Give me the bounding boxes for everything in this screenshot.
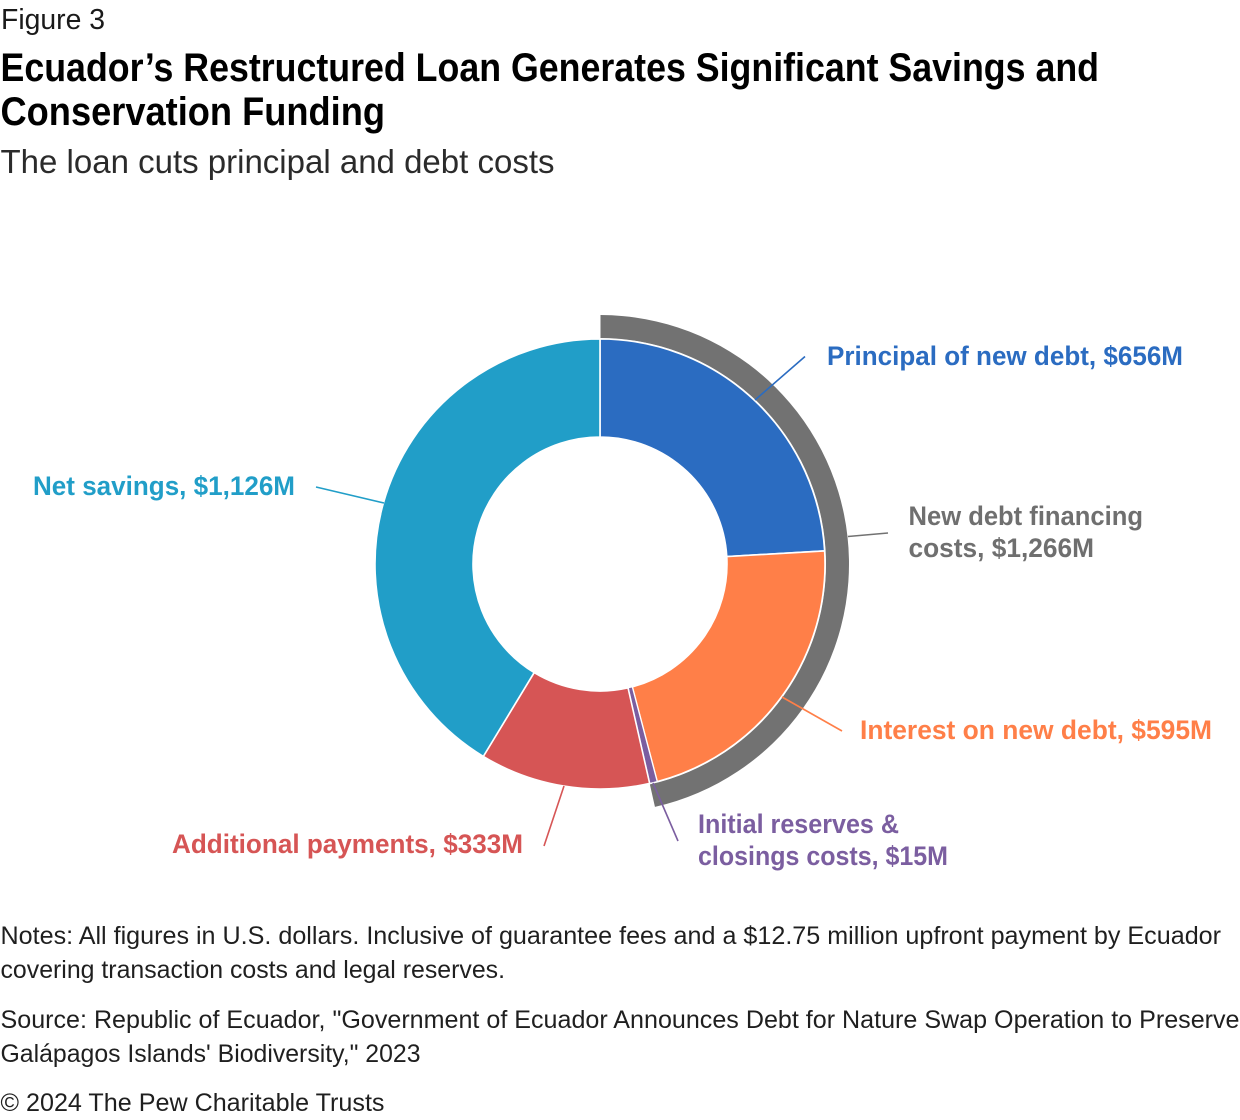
segment: net savings (375, 339, 600, 756)
source: Galápagos Islands' Biodiversity," 2023 (0, 1040, 420, 1068)
label: additional payments: Additional payments, $333M (172, 829, 523, 859)
leader line: interest (782, 697, 842, 731)
leader line: additional payments (544, 786, 564, 846)
title: Conservation Funding (0, 90, 385, 134)
label: principal: Principal of new debt, $656M (827, 341, 1183, 371)
segment: interest on new debt (632, 551, 825, 782)
leader line: reserves (653, 783, 678, 841)
source: Source: Republic of Ecuador, "Government of Ecuador Announces Debt for Nature Swap Operation to Preserve (0, 1006, 1240, 1034)
title: Ecuador’s Restructured Loan Generates Significant Savings and (0, 46, 1099, 90)
notes (0, 922, 1221, 984)
leader line: principal (755, 356, 805, 400)
segment: initial reserves and closing costs (628, 687, 657, 783)
copyright: © 2024 The Pew Charitable Trusts (0, 1089, 384, 1117)
donut chart (375, 315, 849, 807)
label: interest: Interest on new debt, $595M (860, 715, 1212, 745)
subtitle: The loan cuts principal and debt costs (0, 143, 554, 180)
label: reserves (698, 809, 948, 871)
label: reserves: Initial reserves & (698, 809, 899, 839)
leader line: financing costs (848, 533, 888, 536)
source (0, 1006, 1240, 1068)
figure number: Figure 3 (1, 4, 105, 36)
title (0, 46, 1099, 134)
segment: principal of new debt (600, 339, 825, 557)
outer ring: new debt financing costs (600, 315, 849, 807)
label: financing costs: New debt financing (908, 501, 1143, 531)
leader line: net savings (316, 487, 384, 503)
label: reserves: closings costs, $15M (698, 841, 948, 871)
label: net savings: Net savings, $1,126M (33, 471, 295, 501)
label: financing costs (908, 501, 1143, 563)
notes: covering transaction costs and legal reserves. (0, 956, 505, 984)
notes: Notes: All figures in U.S. dollars. Inclusive of guarantee fees and a $12.75 million upfront payment by Ecuador (0, 922, 1221, 950)
label: financing costs: costs, $1,266M (908, 533, 1094, 563)
segment: additional payments (483, 673, 650, 789)
